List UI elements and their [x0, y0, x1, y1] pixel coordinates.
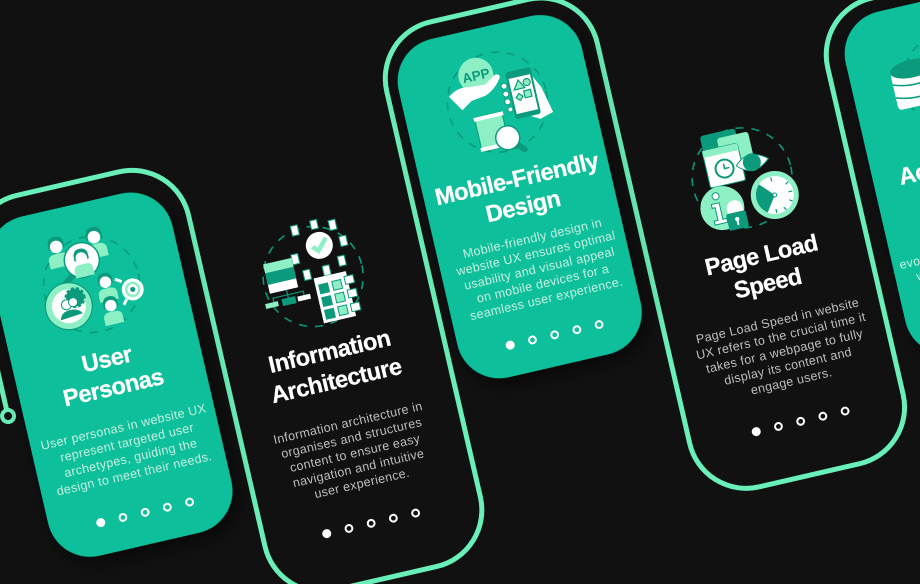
- pagination dots: [321, 508, 420, 539]
- description: user experience.: [313, 466, 411, 501]
- description: engage users.: [749, 365, 834, 398]
- title: Mobile-Friendly: [433, 148, 601, 211]
- card background: [836, 0, 920, 363]
- description: archetypes, guiding the: [63, 436, 199, 480]
- description: seamless user experience.: [469, 274, 624, 323]
- description: organises and structures: [280, 415, 423, 461]
- title: User: [79, 342, 135, 378]
- title: Speed: [732, 264, 804, 305]
- panel: information architecture: [227, 206, 447, 545]
- description: navigation and intuitive: [291, 446, 425, 490]
- panel: user personas: [0, 184, 241, 565]
- description: takes for a webpage to fully: [705, 326, 865, 376]
- pagination dots: [751, 406, 849, 437]
- description: content to ensure easy: [289, 431, 422, 475]
- description: design to meet their needs.: [55, 449, 213, 499]
- description: website UX ensures optimal: [454, 228, 617, 279]
- panel: mobile-friendly design: [389, 6, 650, 387]
- description: represent targeted user: [59, 420, 195, 465]
- icon: database: [884, 22, 920, 140]
- title: Design: [483, 186, 563, 228]
- card background: [0, 184, 241, 565]
- icon: page load speed: [682, 117, 804, 238]
- card background: [389, 6, 650, 387]
- pagination dots: [505, 319, 603, 350]
- description: on mobile devices for a: [475, 262, 610, 306]
- description: UX refers to the crucial time it: [695, 310, 867, 362]
- icon: mobile-friendly design: [437, 42, 560, 164]
- description: display its content and: [723, 345, 853, 388]
- title: Personas: [61, 364, 167, 412]
- title: Information: [266, 326, 393, 379]
- description: Information architecture in: [272, 399, 424, 447]
- title: Architecture: [269, 354, 404, 409]
- app bubble: APP: [461, 65, 491, 86]
- description: Mobile-friendly design in: [461, 216, 603, 261]
- pagination dots: [95, 497, 194, 528]
- title: Page Load: [703, 230, 820, 281]
- icon: information architecture: [249, 212, 373, 337]
- description: usability and visual appeal: [463, 244, 616, 293]
- icon: user personas: [30, 219, 151, 343]
- panel: page load speed: [649, 109, 886, 445]
- description: Page Load Speed in website: [695, 295, 860, 347]
- description: User personas in website UX: [39, 401, 208, 453]
- panel: accessibility: [836, 0, 920, 363]
